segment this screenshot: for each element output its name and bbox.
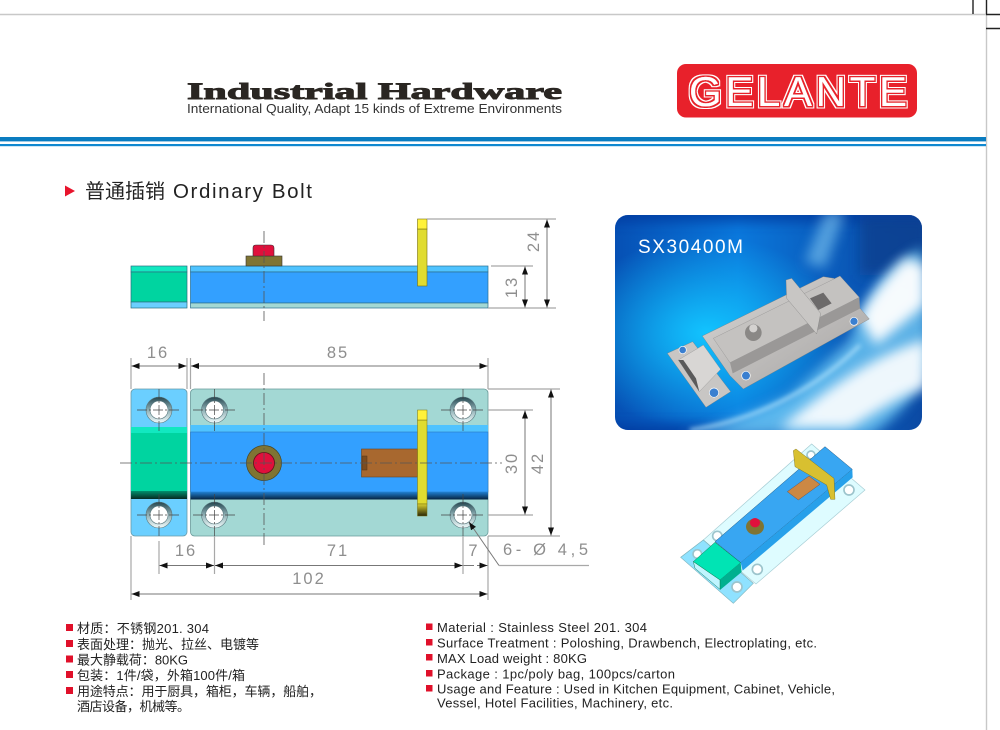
logo: GELANTE: GELANTE — [689, 68, 907, 115]
header blue rule — [0, 137, 986, 146]
surface: Surface Treatment : Poloshing, Drawbench, Electroplating, etc. — [437, 636, 817, 650]
bullets — [66, 624, 73, 694]
heading Chinese text: 普通插销 — [85, 180, 165, 203]
top view drawing — [120, 373, 502, 547]
specs: English — [426, 620, 835, 710]
hole callout: 6- Ø 4,5 — [503, 541, 588, 559]
brown slot — [787, 476, 820, 500]
section heading — [65, 180, 312, 203]
usage: 用途特点：用于厨具，箱柜，车辆，船舶， — [77, 684, 322, 699]
bolt base plate — [190, 389, 488, 536]
package: Package : 1pc/poly bag, 100pcs/carton — [437, 666, 675, 682]
knob top view — [246, 446, 282, 480]
load: 最大静载荷：80KG — [77, 652, 188, 668]
dimension 42: 42 — [529, 452, 547, 474]
bullets — [426, 624, 432, 692]
dimension 71: 71 — [327, 542, 349, 560]
bolt body side view — [190, 266, 488, 308]
isometric drawing — [681, 444, 865, 603]
blue bolt body — [715, 447, 853, 571]
usage: Usage and Feature : Used in Kitchen Equipment, Cabinet, Vehicle, — [437, 682, 835, 696]
photo: steel bolt — [667, 276, 869, 407]
base plate — [703, 444, 865, 584]
handle side view — [418, 219, 427, 286]
catch plate — [681, 540, 753, 603]
dimension 7: 7 — [468, 542, 480, 560]
side view dimensions — [427, 219, 556, 308]
usage continued: 酒店设备，机械等。 — [77, 699, 190, 714]
specs: Chinese — [66, 621, 322, 714]
top view dimensions — [131, 344, 589, 600]
title: Industrial Hardware: Industrial Hardware — [187, 79, 562, 104]
product photo panel — [615, 215, 922, 430]
knob side view — [246, 245, 282, 266]
catch plate — [131, 389, 187, 536]
red knob — [746, 518, 764, 535]
load: MAX Load weight : 80KG — [437, 651, 587, 666]
surface: 表面处理：抛光、拉丝、电镀等 — [77, 637, 259, 652]
side view drawing — [131, 219, 488, 321]
dimension 16 lower: 16 — [175, 542, 197, 560]
header title — [187, 79, 563, 116]
green catch — [693, 542, 742, 590]
dimension 24: 24 — [525, 230, 543, 252]
brown slide slot — [362, 449, 418, 477]
heading English text: Ordinary Bolt — [173, 180, 312, 203]
dimension 85: 85 — [327, 344, 349, 362]
dimension 30: 30 — [503, 452, 521, 474]
yellow handle — [418, 410, 427, 516]
dimension 102: 102 — [292, 570, 326, 588]
mounting holes — [137, 389, 485, 536]
model number: SX30400M — [638, 237, 743, 258]
dimension 13: 13 — [503, 276, 521, 298]
icon: red triangle — [65, 186, 75, 196]
subtitle: International Quality, Adapt 15 kinds of Extreme Environments — [187, 101, 563, 116]
iso holes — [693, 451, 854, 592]
yellow handle — [793, 449, 835, 499]
package: 包装：1件/袋，外箱100件/箱 — [77, 668, 245, 683]
material: Material : Stainless Steel 201. 304 — [437, 620, 647, 635]
dimension 16: 16 — [147, 344, 169, 362]
catch side view — [131, 266, 187, 308]
usage continued: Vessel, Hotel Facilities, Machinery, etc. — [437, 696, 673, 710]
material: 材质：不锈钢201. 304 — [77, 621, 209, 636]
